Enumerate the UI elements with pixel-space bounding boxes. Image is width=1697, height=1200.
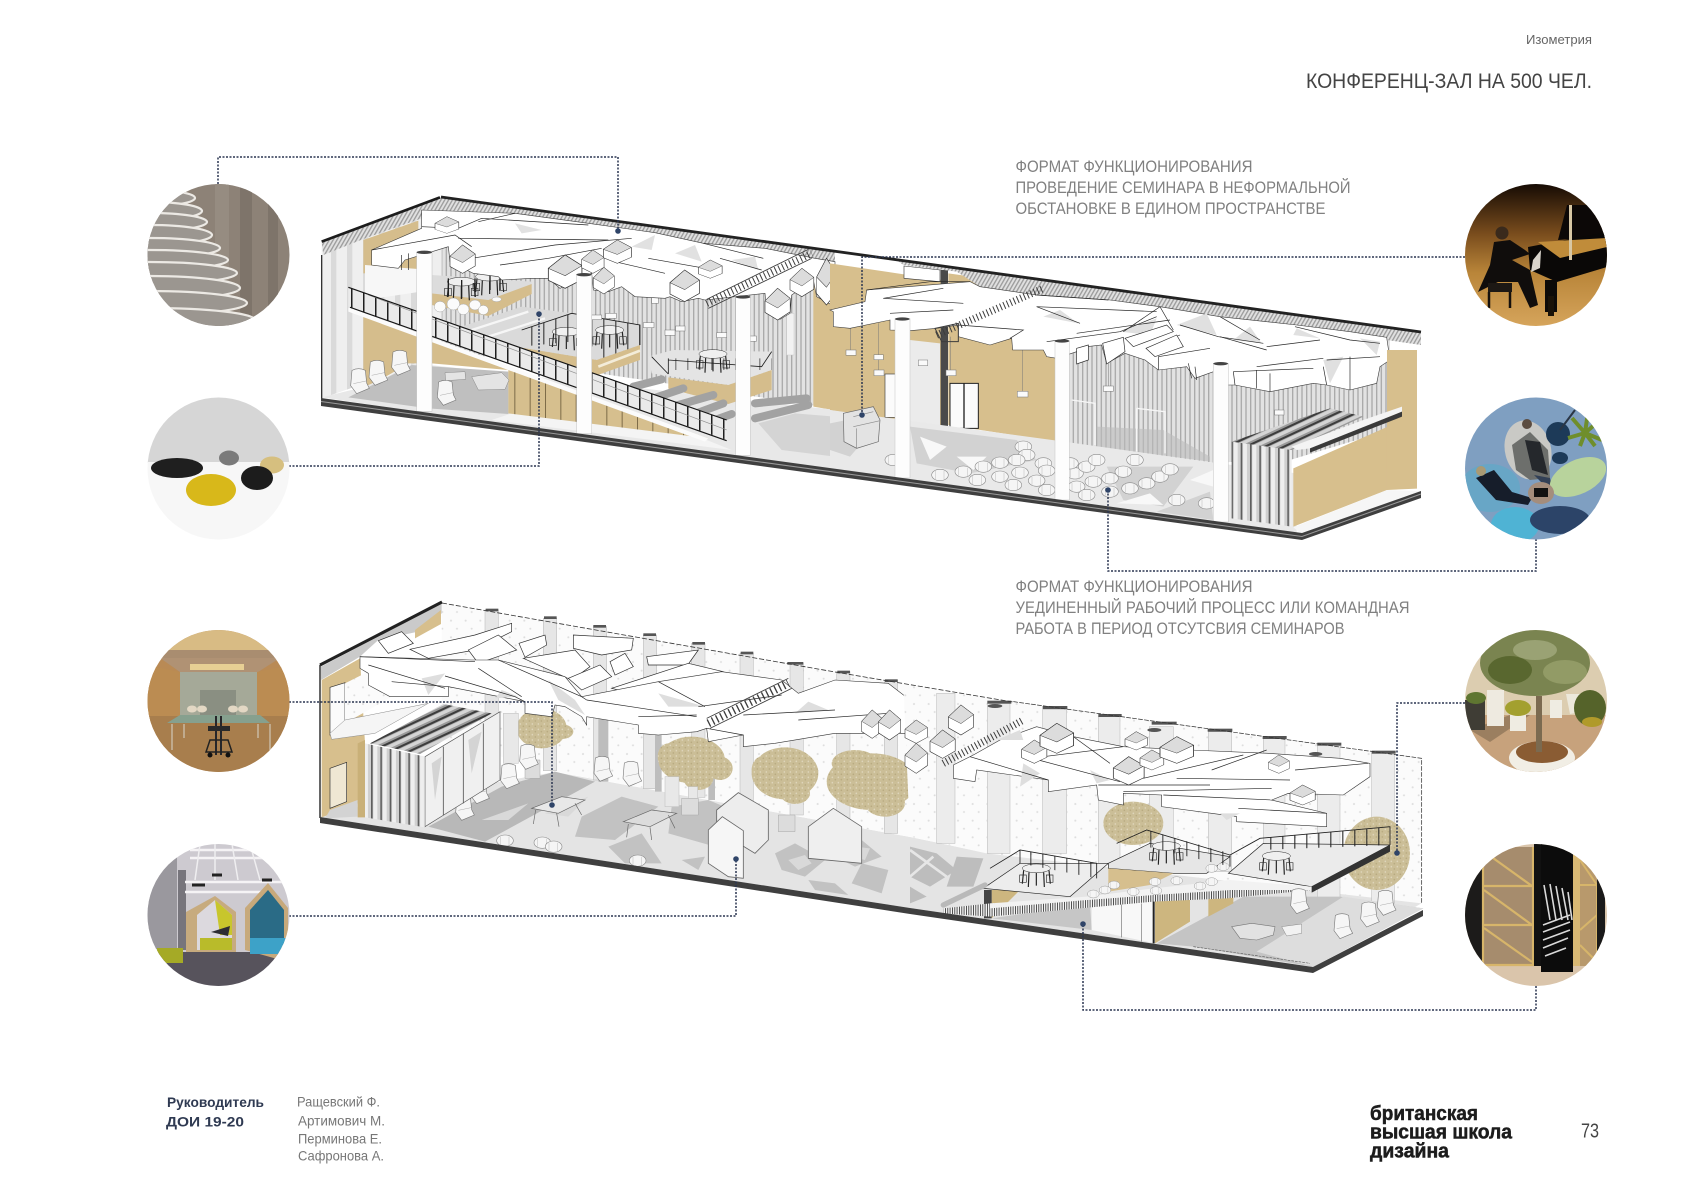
floor slab bbox=[321, 398, 1421, 540]
beam bbox=[1310, 412, 1402, 453]
cup baffles bbox=[905, 705, 1315, 805]
door lines bbox=[1122, 902, 1142, 942]
left half of the hall bbox=[322, 197, 837, 473]
post caps bbox=[486, 609, 898, 682]
right floor dark bbox=[1157, 897, 1423, 967]
stripes wall bbox=[1057, 288, 1213, 463]
black wall edge bbox=[1151, 900, 1157, 943]
photo: house pods bbox=[147, 844, 290, 987]
tan wall start bbox=[813, 270, 837, 411]
folding partition bbox=[1232, 442, 1292, 527]
glass wall darker bbox=[598, 717, 715, 800]
right tan strip bbox=[1387, 350, 1417, 490]
seats stage 1 bbox=[633, 379, 808, 420]
columns bbox=[895, 319, 1228, 522]
right tan wall bbox=[1293, 427, 1387, 527]
end wall bbox=[322, 197, 442, 398]
pale under deck wall bbox=[432, 340, 508, 370]
panel joints bbox=[443, 723, 483, 815]
side table bbox=[1282, 924, 1302, 936]
tree bbox=[1103, 802, 1163, 845]
lounge tables bbox=[445, 372, 509, 390]
tan end wall bbox=[322, 658, 365, 817]
under floor left bbox=[992, 904, 1092, 930]
black deck edge bbox=[1312, 845, 1390, 893]
lower chairs bbox=[1291, 889, 1396, 939]
left half of the hall bbox=[321, 603, 917, 895]
rail posts bbox=[1260, 827, 1390, 850]
table on upper platform bbox=[445, 277, 478, 300]
upper rail posts bbox=[448, 275, 500, 298]
stair plants bbox=[943, 885, 985, 905]
footer: supervisor label bbox=[166, 1094, 264, 1130]
roof line bbox=[441, 197, 1421, 332]
window wall bbox=[442, 603, 910, 837]
footer: supervisor label: Руководитель bbox=[167, 1094, 264, 1110]
wall shadow block bbox=[1097, 427, 1210, 462]
main ceiling cloud mass bbox=[360, 657, 910, 747]
top box bbox=[904, 266, 940, 282]
panel shadows bbox=[432, 732, 482, 800]
footer: names bbox=[297, 1094, 385, 1164]
house pod third bbox=[808, 808, 862, 863]
truss bbox=[708, 683, 788, 723]
ceiling shading bbox=[422, 673, 828, 715]
tan strip stripes bbox=[598, 351, 640, 367]
title: КОНФЕРЕНЦ-ЗАЛ НА 500 ЧЕЛ. bbox=[1306, 70, 1592, 93]
piano bbox=[843, 407, 880, 448]
text block: seminar format: ФОРМАТ ФУНКЦИОНИРОВАНИЯ bbox=[1016, 157, 1252, 176]
white balcony bbox=[330, 703, 428, 739]
mid deck white stripes bbox=[472, 312, 545, 337]
lower table bbox=[696, 350, 730, 373]
columns bbox=[417, 252, 750, 455]
door divide bbox=[962, 383, 966, 428]
house pod back bbox=[717, 793, 768, 853]
round column caps bbox=[988, 704, 1322, 756]
ceiling leaf lines bbox=[372, 213, 763, 273]
page number: 73 bbox=[1581, 1120, 1599, 1142]
photo: storage shelves bbox=[1464, 844, 1608, 987]
text block: seminar format bbox=[1016, 157, 1350, 218]
mid deck bbox=[1108, 843, 1230, 873]
panels of partition bbox=[425, 712, 500, 827]
house pod front bbox=[708, 817, 743, 878]
isometric drawing: seminar layout bbox=[321, 197, 1421, 540]
white back wall bbox=[345, 672, 392, 723]
door panel bbox=[885, 374, 896, 417]
text block: seminar format: ПРОВЕДЕНИЕ СЕМИНАРА В НЕФОРМАЛЬНОЙ bbox=[1016, 178, 1350, 197]
under white block bbox=[1092, 898, 1155, 943]
truss outline bbox=[707, 678, 792, 728]
text block: solo work format: РАБОТА В ПЕРИОД ОТСУТСВИЯ СЕМИНАРОВ bbox=[1016, 619, 1344, 638]
roof hatch band bbox=[322, 197, 835, 262]
floor shadows bbox=[575, 797, 888, 895]
right deck bbox=[1228, 843, 1390, 887]
stair white edge bbox=[990, 880, 1312, 908]
floor bbox=[320, 772, 1422, 967]
tan front upper bbox=[432, 284, 532, 316]
table two bbox=[623, 810, 677, 840]
post caps bbox=[987, 701, 1396, 754]
truss rails bbox=[707, 249, 812, 308]
folded partition bbox=[365, 743, 425, 827]
tan panel 3 bbox=[992, 890, 1020, 918]
isometric drawing: work layout bbox=[320, 602, 1423, 973]
tan top bbox=[415, 610, 441, 638]
column caps bbox=[895, 317, 1228, 365]
tan wall under balcony bbox=[363, 317, 432, 390]
floor shadows bbox=[830, 420, 1213, 520]
white beam face bbox=[1292, 407, 1402, 450]
lounge chairs bbox=[456, 744, 642, 820]
trees bbox=[517, 708, 917, 817]
footer: names: Артимович М. bbox=[298, 1112, 385, 1128]
white back area bbox=[365, 265, 432, 300]
pendant lights bbox=[846, 350, 1284, 415]
blue strip bbox=[787, 313, 794, 355]
lounge chairs bbox=[351, 350, 456, 405]
audience chairs bbox=[1087, 863, 1229, 898]
ceiling shading bbox=[435, 218, 758, 270]
leader anchor dots bbox=[536, 228, 1400, 927]
photo: pebble poufs bbox=[148, 398, 290, 506]
tree right bbox=[1343, 817, 1410, 890]
deck rails bbox=[990, 827, 1390, 878]
roof hatch band bbox=[897, 260, 1421, 345]
tables on deck bbox=[1020, 842, 1293, 887]
ceiling shading bbox=[997, 730, 1240, 820]
right half of the hall bbox=[830, 260, 1421, 537]
column caps bbox=[417, 251, 750, 299]
roof line bbox=[442, 603, 1013, 702]
wall posts bbox=[937, 693, 1394, 903]
table one bbox=[532, 797, 585, 827]
slab highlight bbox=[321, 402, 1421, 536]
truss bbox=[943, 720, 1023, 763]
right floor light bbox=[1257, 897, 1423, 967]
photo: pianist bbox=[1464, 184, 1608, 327]
tan under mid deck bbox=[515, 345, 640, 375]
partition slats bbox=[370, 704, 492, 754]
footer: supervisor label: ДОИ 19-20 bbox=[166, 1114, 244, 1130]
dark end wall line bbox=[320, 602, 442, 665]
leader lines bbox=[218, 157, 1536, 1010]
table mid deck bbox=[550, 327, 583, 350]
back wall stripes bbox=[442, 198, 835, 408]
stair band bbox=[943, 890, 1312, 917]
footer: names: Перминова Е. bbox=[298, 1130, 382, 1146]
left deck bbox=[983, 863, 1108, 897]
photo: felt baffle bbox=[148, 184, 290, 326]
table mid deck right bbox=[593, 326, 626, 349]
tan wall right bbox=[948, 273, 1057, 442]
right floor bbox=[1293, 490, 1421, 534]
ceiling leaf lines bbox=[970, 737, 1368, 813]
roof line dashed bbox=[1013, 702, 1422, 903]
ceiling leaf lines bbox=[360, 657, 888, 735]
piano detail bbox=[853, 412, 880, 448]
floor highlights bbox=[920, 437, 1213, 505]
table on upper platform right bbox=[473, 272, 506, 295]
footer: names: Сафронова А. bbox=[298, 1148, 384, 1164]
lamp rods bbox=[851, 323, 1108, 392]
floor shadows bbox=[910, 847, 983, 903]
chairs upper bbox=[434, 297, 501, 315]
ceiling shading bbox=[1043, 310, 1380, 383]
footer: names: Ращевский Ф. bbox=[297, 1094, 380, 1110]
lower deck bbox=[648, 350, 772, 385]
floor bbox=[322, 363, 837, 473]
light floor strip bbox=[492, 413, 732, 450]
coffee table bbox=[1232, 923, 1275, 940]
partition slats bbox=[1232, 408, 1363, 450]
text block: solo work format: ФОРМАТ ФУНКЦИОНИРОВАНИЯ bbox=[1016, 577, 1252, 596]
columns bbox=[503, 713, 698, 807]
window wall bbox=[903, 683, 1422, 903]
double doors bbox=[950, 383, 978, 428]
mid deck rail bbox=[522, 313, 640, 360]
ceiling leaf lines bbox=[867, 282, 1380, 392]
mid deck bbox=[462, 307, 640, 360]
stair railing bbox=[348, 287, 727, 440]
section label: isometry: Изометрия bbox=[1526, 32, 1592, 47]
floor end bbox=[325, 800, 358, 818]
truss gusset bbox=[935, 323, 958, 342]
photo: olive tree bbox=[1464, 630, 1608, 775]
window opening bbox=[330, 683, 345, 735]
lounge floor bbox=[348, 365, 508, 414]
tan wall left bbox=[830, 263, 942, 428]
platform upper bbox=[432, 275, 532, 303]
photo: table tennis room bbox=[147, 630, 290, 773]
rail lines bbox=[348, 287, 727, 441]
cup baffles bbox=[435, 217, 836, 320]
floor line dashed bbox=[1193, 947, 1310, 963]
upper separate baffles bbox=[378, 623, 723, 700]
lower rail bbox=[652, 352, 772, 374]
floor slab bbox=[320, 817, 1423, 973]
ceiling cloud mass bbox=[372, 210, 835, 319]
elevator door bbox=[330, 762, 347, 808]
dark strip bbox=[941, 270, 948, 429]
white panel bbox=[910, 340, 940, 427]
wall posts bbox=[485, 610, 898, 833]
rail posts mid bbox=[1147, 830, 1230, 867]
text block: solo work format: УЕДИНЕННЫЙ РАБОЧИЙ ПРОЦЕСС ИЛИ КОМАНДНАЯ bbox=[1016, 598, 1410, 617]
photo: beanbag lounge bbox=[1460, 397, 1612, 543]
cup baffles middle bbox=[862, 710, 901, 740]
tan stair panels bbox=[508, 370, 708, 438]
tan under lower deck bbox=[668, 370, 772, 404]
rail posts left bbox=[1020, 850, 1097, 878]
tan panels bbox=[1155, 897, 1190, 943]
white floor lines bbox=[910, 850, 947, 877]
ceiling cloud mass bbox=[830, 282, 1390, 392]
mid deck rail outline bbox=[522, 313, 640, 345]
truss bbox=[937, 288, 1043, 335]
logo: school name: высшая школа bbox=[1370, 1122, 1513, 1144]
pendant lights bbox=[592, 297, 756, 341]
tan panel 2 bbox=[1208, 893, 1233, 917]
floor shadows bbox=[758, 413, 835, 457]
small ceiling boxes bbox=[1077, 325, 1183, 364]
right half of the hall bbox=[903, 683, 1423, 967]
text block: solo work format bbox=[1016, 577, 1410, 638]
stripes wall right bbox=[1213, 310, 1390, 463]
truss bbox=[707, 253, 812, 303]
end wall edge bbox=[320, 255, 324, 400]
left edge bbox=[319, 665, 321, 818]
stair treads bbox=[348, 287, 727, 440]
lower rail posts bbox=[668, 358, 772, 370]
floor bbox=[830, 410, 1302, 537]
text block: seminar format: ОБСТАНОВКЕ В ЕДИНОМ ПРОСТРАНСТВЕ bbox=[1016, 199, 1326, 218]
left dark edge bbox=[322, 197, 440, 242]
tan end wall upper bbox=[363, 221, 418, 273]
panel outline on wall bbox=[1072, 400, 1165, 453]
dark post bbox=[984, 890, 992, 918]
tread lines bbox=[368, 295, 727, 430]
tan mid bbox=[1108, 868, 1173, 892]
blob chairs bbox=[497, 835, 646, 866]
dark floor zone bbox=[428, 772, 595, 842]
audience chairs bbox=[885, 441, 1215, 509]
logo: school name: дизайна bbox=[1370, 1140, 1450, 1162]
tan strip bbox=[358, 740, 365, 817]
pots bbox=[525, 760, 795, 832]
ceiling mass bbox=[953, 727, 1370, 827]
left end wall hatch bbox=[321, 603, 442, 680]
logo: school name: британская bbox=[1370, 1103, 1478, 1125]
floor highlights bbox=[482, 797, 870, 870]
white stair underside bbox=[348, 307, 708, 442]
logo: school name bbox=[1370, 1103, 1513, 1162]
